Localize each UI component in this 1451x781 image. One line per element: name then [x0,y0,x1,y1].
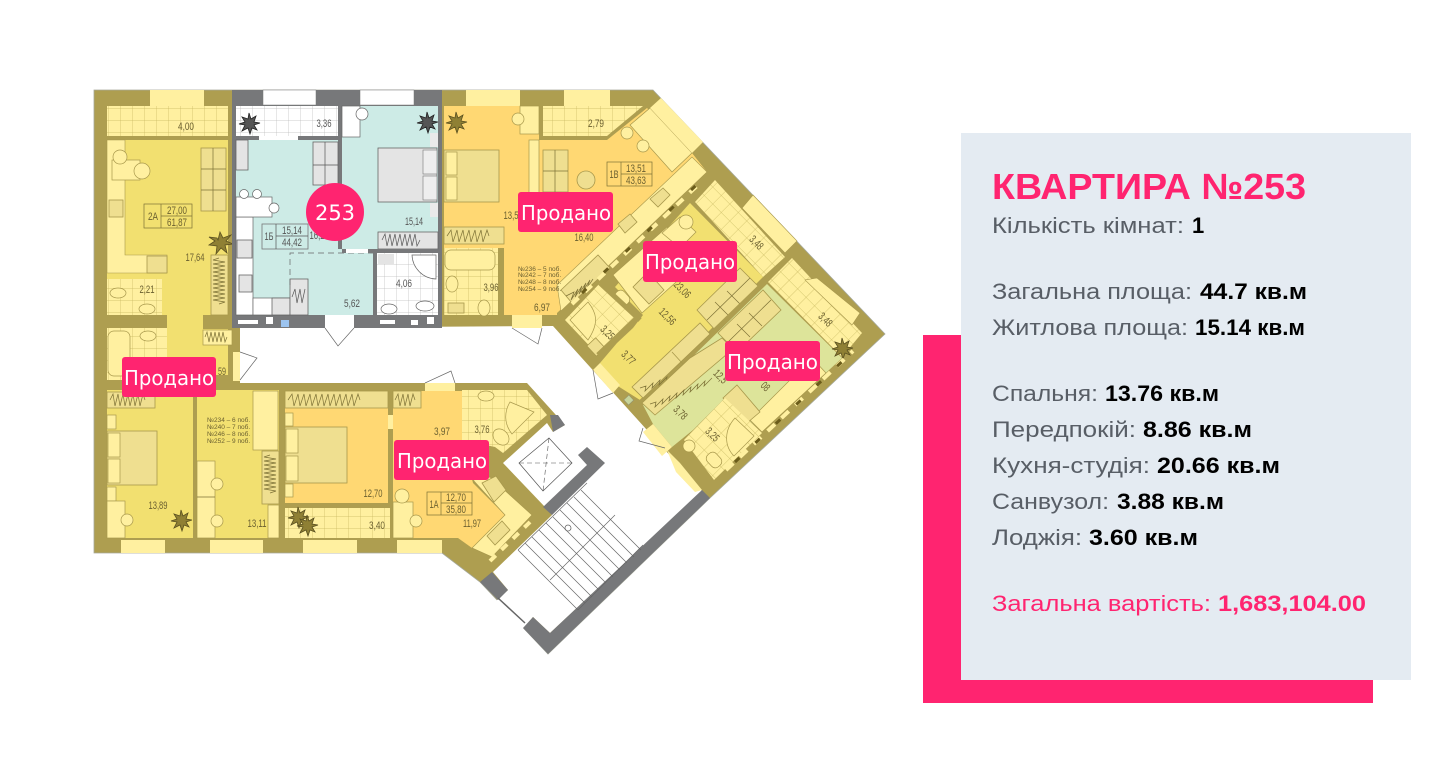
total price: 1,683,104.00 [1218,591,1366,616]
panel: apartment details [961,133,1411,680]
apartment 2A upper rooms [107,90,257,390]
apartment 2A upper rooms: 27,00 [167,205,187,217]
window chains along diagonal facades [572,176,853,470]
apartment 1G green diagonal: 3,78 [670,403,690,423]
apartment 2A upper rooms: 61,87 [167,217,187,229]
window fittings [238,320,250,324]
apartment 1G green diagonal: 3,25 [702,425,722,445]
lower left apartment 2A bedrooms: №240 – 7 поб. [207,423,250,431]
highlight marker 253 [306,183,364,241]
lower right apartment 1A orange: 12,70 [446,492,466,504]
lower right apartment 1A orange: 3,40 [369,520,385,532]
sold badge 5: Продано [397,449,487,473]
living area: Житлова площа: [992,315,1188,340]
lower right apartment 1A orange: 3,97 [434,426,450,438]
kitchen studio area [992,453,1280,478]
sold badge 5 [394,440,489,480]
apartment 1B yellow diagonal: 12,56 [656,306,678,328]
panel: pink backing [923,335,1373,703]
apartment 1V orange: №236 – 5 поб. [518,265,561,273]
loggia area: Лоджія: [992,525,1082,550]
hallway area: 8.86 кв.м [1143,417,1252,442]
apartment 253 highlighted: 5,62 [344,298,360,310]
bathroom 4.06 [373,249,438,253]
grey walls [232,90,442,106]
room [600,203,763,400]
bathroom area: 3.88 кв.м [1117,489,1224,514]
apartment 1V orange: 43,63 [626,175,646,187]
living room [236,140,338,315]
sold badge 4: Продано [124,366,214,390]
rooms count: 1 [1192,213,1204,238]
total area [992,279,1307,304]
lower left apartment 2A bedrooms: №234 – 6 поб. [207,416,250,424]
apartment 253 highlighted [232,90,442,346]
apartment 1V orange: 13,51 [626,163,646,175]
sold badge 3: Продано [727,350,818,374]
apartment 1G green diagonal: 12,5 [710,367,730,387]
wardrobes [632,323,710,398]
building silhouette walls [94,90,885,654]
apartment 1B yellow diagonal [565,180,797,403]
apartment 1V orange: 1В [610,169,618,181]
apartment 1B yellow diagonal: 23,06 [671,279,693,301]
lower right apartment 1A orange: 35,80 [446,504,466,516]
apartment 253 highlighted: 44,42 [282,237,302,249]
bedroom furniture [342,106,360,137]
bathroom area: Санвузол: [992,489,1109,514]
loggia area [992,525,1198,550]
apartment 1V orange: №254 – 9 поб. [518,285,561,293]
apartment 253 highlighted: 3,36 [316,118,332,130]
apartment 1B yellow diagonal: 3,48 [746,233,766,253]
apartment 1B yellow diagonal: 3,25 [597,323,617,343]
living area: 15.14 кв.м [1195,315,1305,340]
apartment 253 highlighted: 1Б [264,231,274,243]
loggia top [695,180,785,277]
rooms count: Кількість кімнат: [992,213,1184,238]
sold badge 3 [725,341,820,381]
floor plan [94,90,885,654]
sold badge 1 [518,192,613,232]
apartment 1V orange: 2,79 [588,118,604,130]
bedroom area [992,381,1219,406]
lower right apartment 1A orange: 11,97 [463,518,481,530]
apartment 253 highlighted: 4,06 [396,278,412,290]
apartment 2A upper rooms: 2А [148,211,158,223]
apartment 1V orange: 6,97 [534,302,550,314]
kitchen cabinets [236,217,253,315]
loggia area: 3.60 кв.м [1089,525,1198,550]
bathroom area [992,489,1224,514]
total price [992,591,1366,616]
lower right apartment 1A orange [285,371,547,561]
hallway area: Передпокій: [992,417,1136,442]
living area [992,315,1305,340]
corridor, elevator shaft and stairwell floor [240,326,702,633]
room labels [262,224,308,249]
lower left apartment 2A bedrooms: 13,11 [248,518,266,530]
apartment 2A upper rooms: 17,64 [186,252,204,264]
sold badge 4 [122,357,216,397]
apartment 1V orange: №242 – 7 поб. [518,271,561,279]
loggia 3.36 [236,106,338,136]
apartment 1G green diagonal [624,258,862,492]
elevator shaft [519,415,605,515]
apartment 1V orange: 13,5 [504,210,518,222]
apartment 1G green diagonal: 3,48 [815,310,835,330]
lower left apartment 2A bedrooms: №252 – 9 поб. [207,437,250,445]
sold badge 2 [643,241,737,282]
lower right apartment 1A orange: 3,76 [474,424,490,436]
apartment 1B yellow diagonal: 3,77 [618,348,638,368]
sold badge 2: Продано [645,250,735,274]
apartment 1V orange: №248 – 8 поб. [518,278,561,286]
apartment 2A upper rooms: 4,00 [178,121,194,133]
heading: КВАРТИРА №253 [992,166,1306,207]
sold badge 1: Продано [521,201,611,225]
lower right apartment 1A orange: 1А [430,499,439,511]
hallway area [992,417,1252,442]
divider wall [640,257,791,403]
lower left apartment 2A bedrooms: №246 – 8 поб. [207,430,250,438]
apartment 1V orange: 16,40 [574,232,594,244]
kitchen studio area: 20.66 кв.м [1157,453,1280,478]
bedroom area: Спальня: [992,381,1098,406]
total area: 44.7 кв.м [1200,279,1307,304]
apartment 253 highlighted: 15,14 [405,216,423,228]
lower left apartment 2A bedrooms: 13,89 [148,500,168,512]
apartment 2A upper rooms: 59 [218,366,226,378]
kitchen studio area: Кухня-студія: [992,453,1150,478]
apartment 1G green diagonal: 08 [758,380,772,394]
highlight marker 253: 253 [315,201,355,225]
apartment 2A upper rooms: 2,21 [140,284,154,296]
lower right apartment 1A orange: 12,70 [364,488,382,500]
total price: Загальна вартість: [992,591,1211,616]
apartment 253 highlighted: 16,2 [310,230,324,242]
stairwell [480,483,710,654]
door to corridor [593,363,620,393]
bedroom area: 13.76 кв.м [1105,381,1219,406]
lower left apartment 2A bedrooms [107,390,279,553]
wall between bath and room [598,283,640,355]
bath [565,283,637,355]
apartment 253 highlighted: 15,14 [282,225,302,237]
apartment 1V orange [444,90,707,344]
total area: Загальна площа: [992,279,1192,304]
apartment 1V orange: 3,96 [484,282,498,294]
